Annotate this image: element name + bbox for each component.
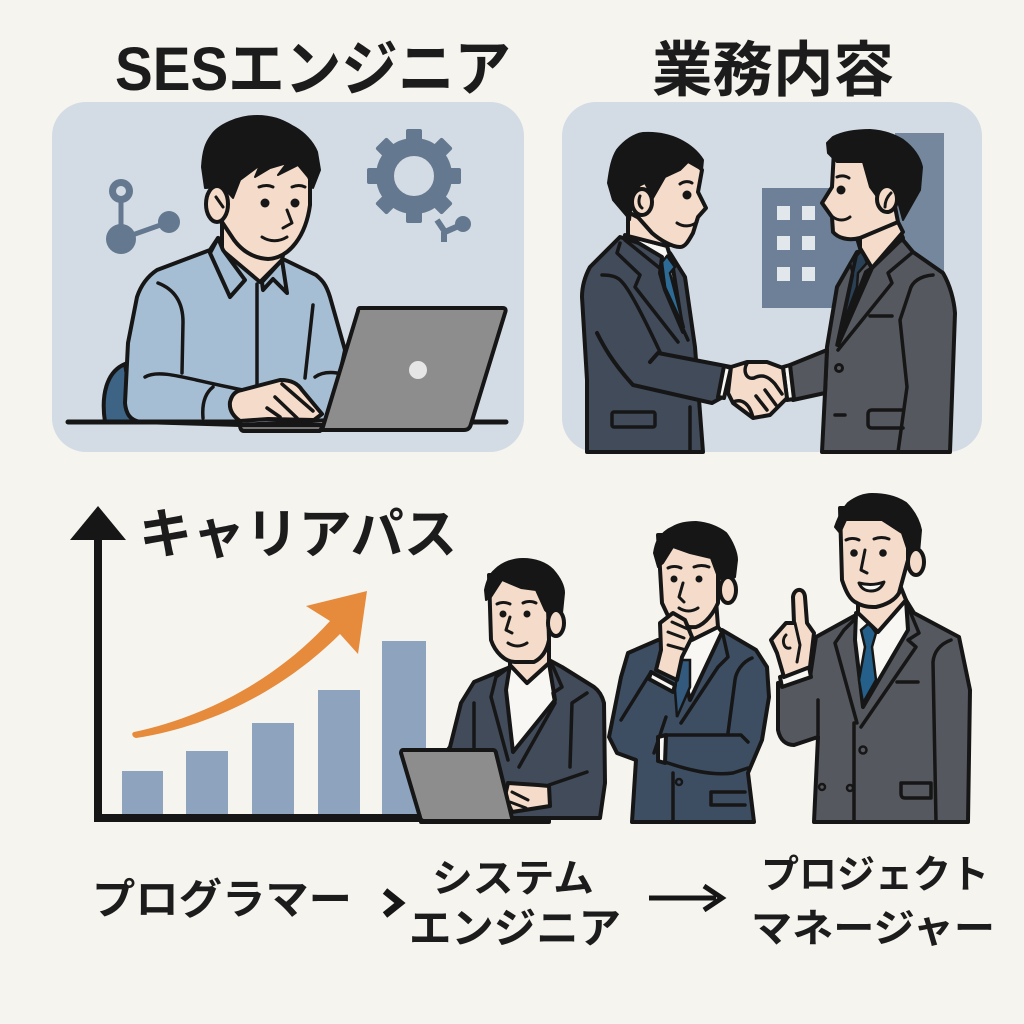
head [658, 535, 718, 627]
hair [608, 133, 703, 220]
hair [654, 522, 737, 583]
label: プロジェクトマネージャー: マネージャー [751, 908, 995, 951]
ear [877, 186, 897, 212]
handshake [728, 362, 787, 418]
lapels and seams [818, 602, 951, 822]
head [489, 575, 549, 662]
cuff [718, 366, 731, 398]
neck [222, 220, 286, 282]
title: 業務内容: 業務内容 [652, 37, 894, 104]
person: systems engineer thinking [609, 522, 769, 822]
label: システムエンジニア: エンジニア [409, 905, 621, 952]
label: プロジェクトマネージャー [751, 854, 995, 951]
hand pointing up [771, 590, 814, 677]
face [850, 549, 858, 557]
sleeve [790, 350, 827, 400]
sleeve cuff [649, 672, 675, 692]
tie [675, 660, 690, 717]
pocket [612, 412, 655, 427]
neck [860, 218, 903, 268]
hand [505, 783, 550, 812]
engineer face [216, 186, 305, 241]
suit [609, 630, 769, 822]
person: project manager pointing up [771, 494, 970, 822]
engineer hand [230, 380, 322, 421]
hand on chin [656, 613, 692, 680]
face [500, 610, 506, 618]
lapels and seams [602, 240, 690, 452]
head [636, 158, 706, 247]
icon: small connector [437, 216, 471, 242]
bars [122, 641, 426, 816]
building [762, 133, 944, 308]
shirt collar [210, 238, 287, 297]
neck [628, 212, 680, 246]
left businessman [582, 133, 731, 452]
face [836, 186, 846, 194]
ear [720, 577, 736, 603]
right businessman [783, 130, 955, 452]
panel: SES engineer working at laptop [52, 102, 524, 452]
cuff [783, 365, 794, 400]
engineer shirt [125, 238, 345, 425]
icon: network nodes [106, 179, 180, 254]
ear [548, 610, 564, 636]
neck [510, 636, 549, 683]
laptop [240, 308, 506, 431]
panel: business handshake [562, 102, 982, 452]
suit [778, 600, 970, 822]
suit [440, 660, 605, 818]
sleeve cuff [780, 667, 811, 687]
chart: career growth bars with axes [70, 506, 434, 818]
chair back [104, 364, 135, 422]
shirt [506, 663, 555, 752]
axes [98, 530, 434, 818]
arrow: growth [132, 591, 367, 738]
lapels and seams [837, 240, 933, 452]
title: キャリアパス: キャリアパス [139, 505, 457, 565]
hair [827, 130, 922, 220]
shirt collar and tie [625, 235, 683, 332]
shirt [855, 600, 908, 707]
ear [632, 189, 652, 215]
folded arm [665, 735, 748, 774]
face [670, 576, 678, 582]
label: プログラマー: プログラマー [92, 876, 352, 923]
desk line [68, 420, 506, 424]
ear [908, 549, 924, 575]
mouth [859, 582, 884, 591]
shirt collar and tie [838, 226, 903, 345]
arrow: chevron to systems engineer [385, 891, 400, 915]
title: SESエンジニア: SESエンジニア [115, 35, 511, 103]
label: システムエンジニア [409, 858, 621, 952]
hair [835, 494, 921, 557]
lapels and seams [474, 662, 587, 785]
person: programmer with laptop [401, 559, 605, 822]
sleeve [597, 333, 731, 403]
shirt details [145, 283, 337, 418]
face [682, 190, 692, 200]
suit [822, 240, 955, 452]
tie [859, 623, 876, 703]
label: システムエンジニア: システム [432, 858, 594, 901]
button [836, 364, 842, 372]
shirt [680, 627, 722, 700]
neck [676, 600, 718, 640]
label: プロジェクトマネージャー: プロジェクト [761, 854, 989, 897]
engineer head [222, 150, 310, 259]
hair [485, 559, 564, 618]
pocket [835, 410, 903, 428]
arrow: to project manager [649, 886, 722, 910]
head [822, 150, 898, 239]
icon: gear [367, 129, 461, 223]
head [840, 508, 908, 607]
lapels and seams [621, 630, 752, 822]
suit [582, 237, 703, 452]
engineer ear [206, 186, 228, 222]
engineer hair [202, 116, 320, 198]
neck [858, 585, 906, 632]
laptop [421, 818, 549, 822]
